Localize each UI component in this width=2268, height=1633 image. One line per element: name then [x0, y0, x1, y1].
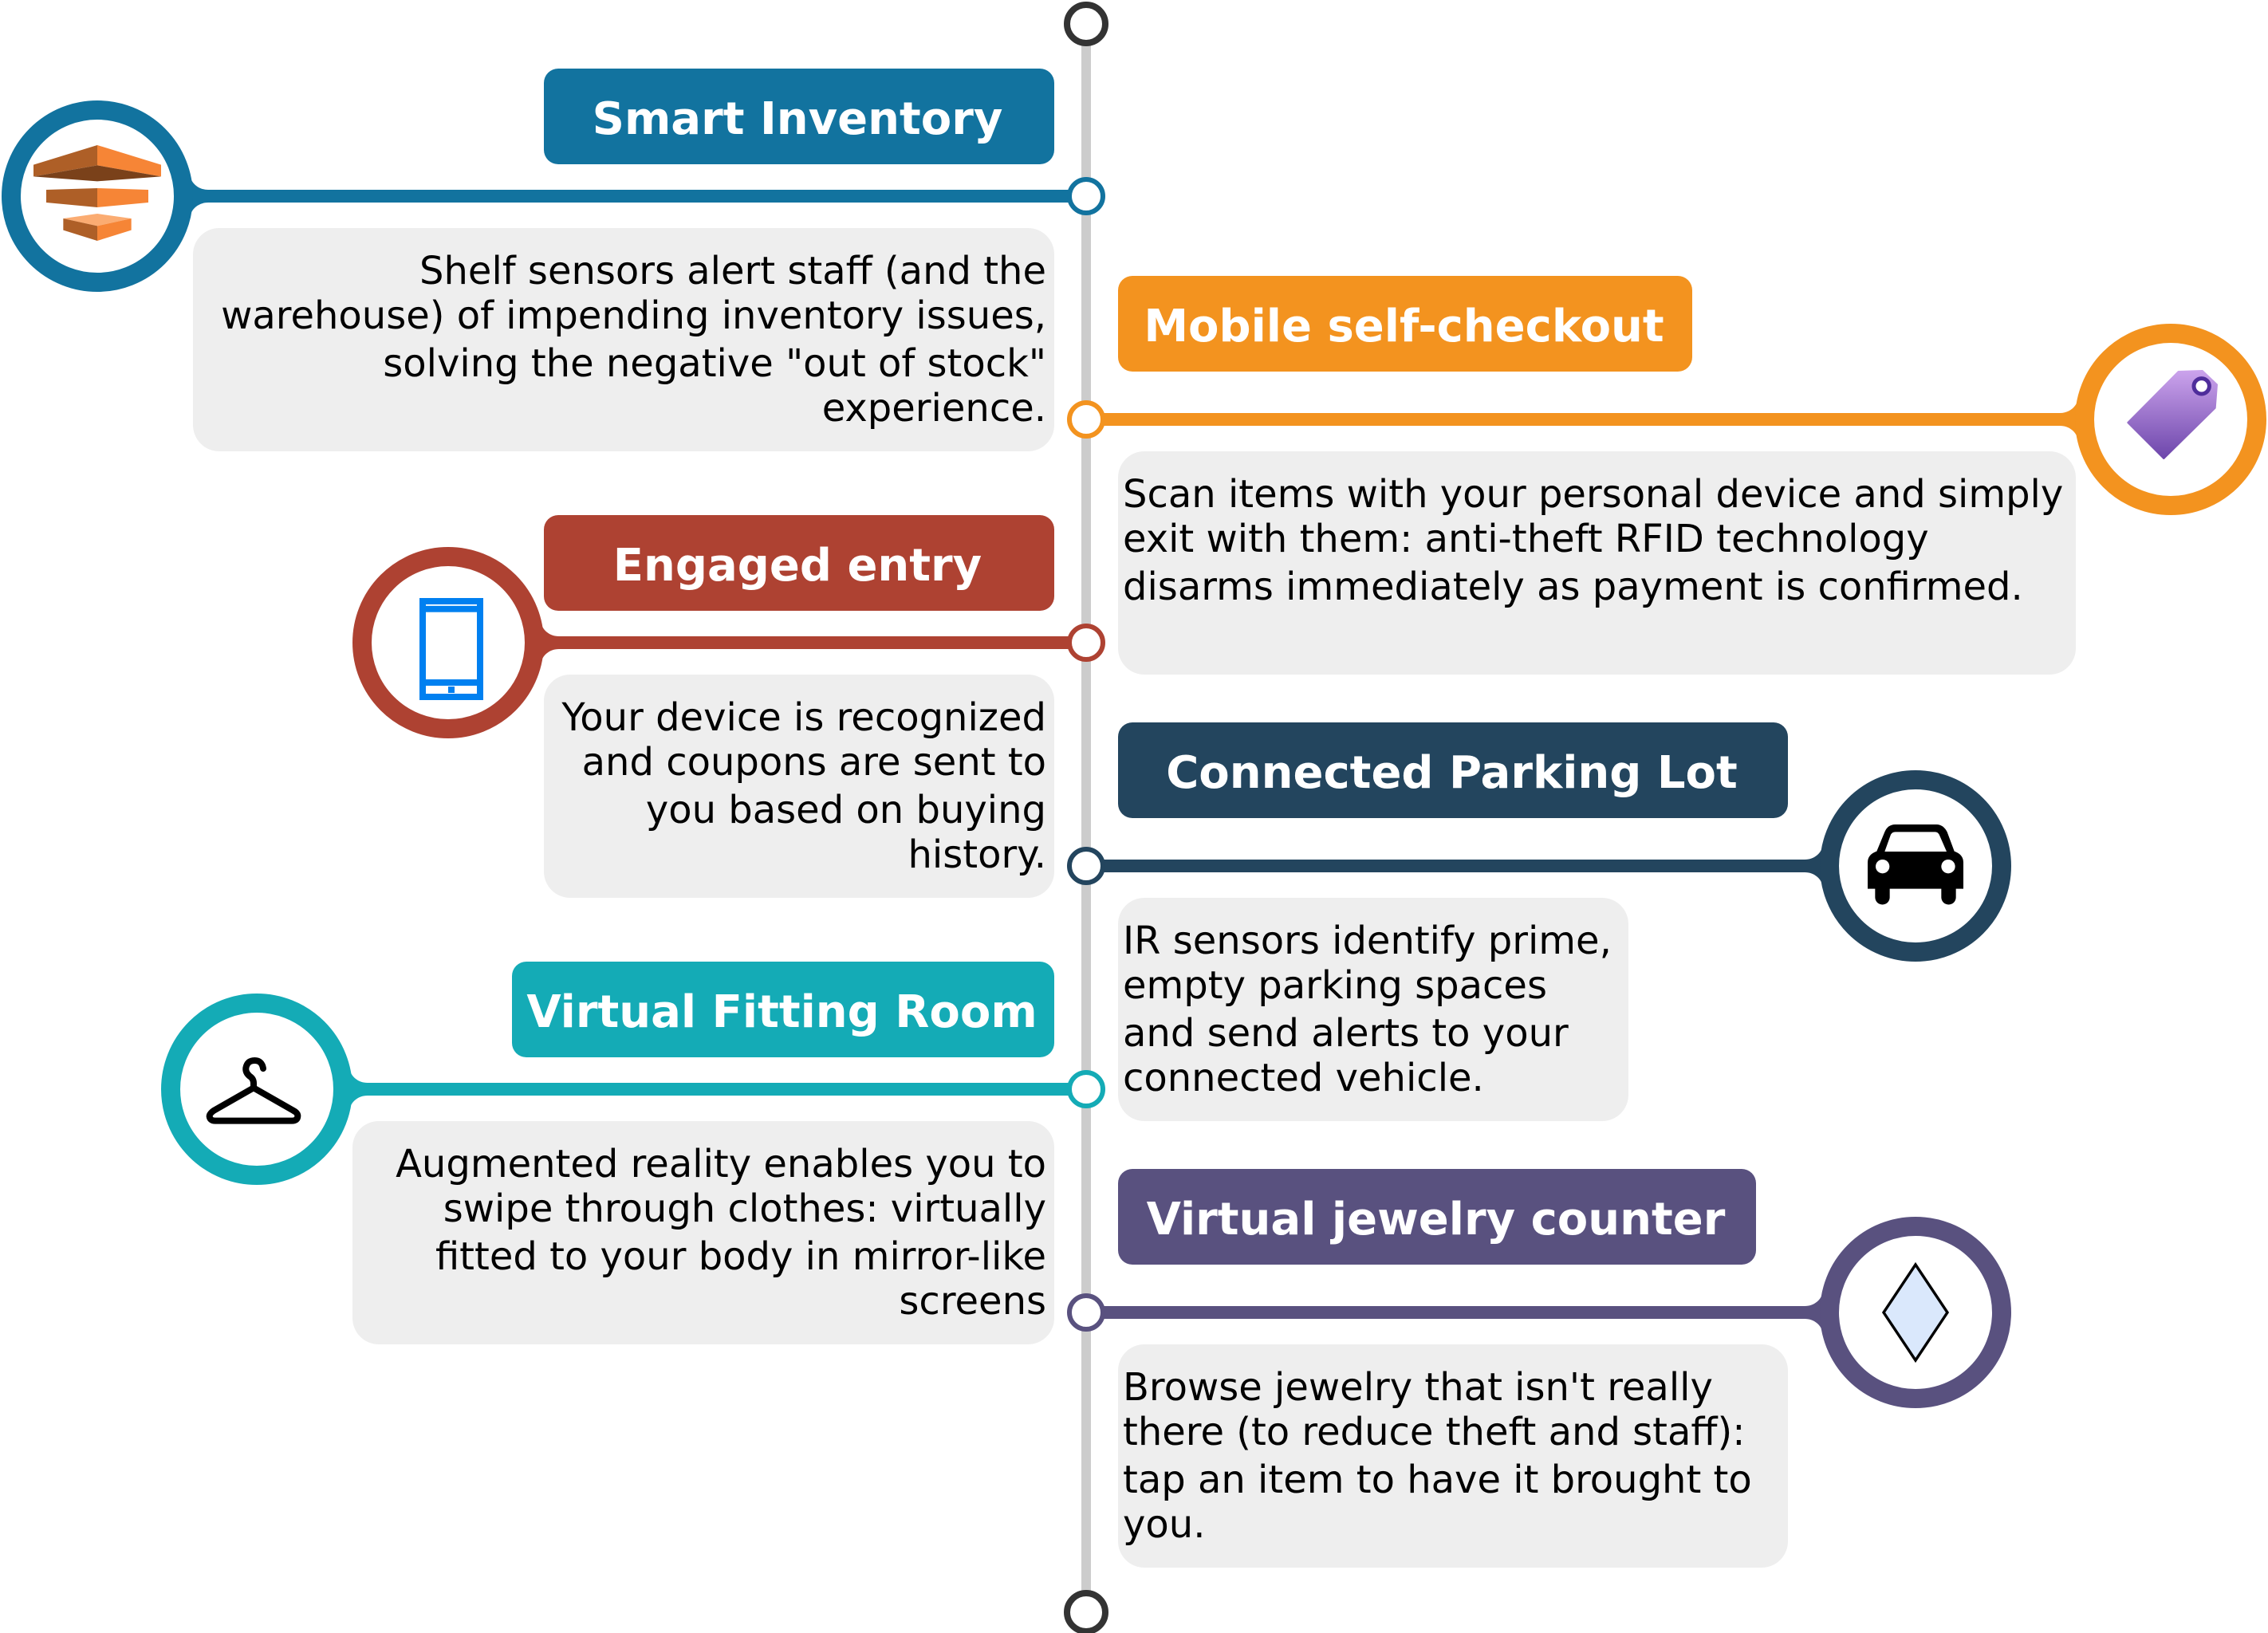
text block: Engaged entry description: you based on buying — [646, 788, 1046, 832]
text block: Engaged entry description: and coupons are sent to — [582, 740, 1046, 785]
icon ring: clothes hanger — [171, 1003, 343, 1175]
heading: Virtual Fitting Room: Virtual Fitting Room — [526, 986, 1038, 1038]
icon ring: inventory layers — [11, 110, 183, 282]
text block: Mobile self-checkout description — [1118, 451, 2076, 675]
text block: Smart Inventory description — [193, 228, 1054, 451]
heading: Virtual jewelry counter: Virtual jewelry counter — [1147, 1194, 1726, 1245]
text block: Mobile self-checkout description: disarms immediately as payment is confirmed. — [1123, 565, 2023, 609]
text block: Virtual Fitting Room description: fitted to your body in mirror-like — [435, 1234, 1046, 1279]
text block: Mobile self-checkout description: exit with them: anti-theft RFID technology — [1123, 517, 1929, 561]
heading: Connected Parking Lot: Connected Parking Lot — [1166, 747, 1738, 799]
connector: Engaged entry — [528, 622, 1103, 663]
text block: Engaged entry description: history. — [908, 832, 1046, 877]
text block: Virtual jewelry counter description: Browse jewelry that isn't really — [1123, 1365, 1713, 1410]
text block: Connected Parking Lot description — [1118, 898, 1628, 1121]
text block: Virtual Fitting Room description: screens — [899, 1279, 1046, 1324]
text block: Smart Inventory description: solving the negative "out of stock" — [383, 341, 1046, 386]
text block: Smart Inventory description: Shelf sensors alert staff (and the — [419, 249, 1046, 293]
text block: Virtual Fitting Room description — [352, 1121, 1054, 1344]
text block: Virtual jewelry counter description — [1118, 1344, 1788, 1568]
heading: Virtual jewelry counter — [1118, 1169, 1756, 1265]
heading: Connected Parking Lot — [1118, 722, 1788, 818]
panel: Virtual Fitting Room — [171, 962, 1103, 1344]
text block: Smart Inventory description: experience. — [822, 386, 1046, 431]
heading: Mobile self-checkout — [1118, 276, 1692, 372]
text block: Virtual jewelry counter description: you. — [1123, 1502, 1205, 1547]
panel: Virtual jewelry counter — [1069, 1169, 2002, 1568]
text block: Smart Inventory description: warehouse) of impending inventory issues, — [221, 293, 1046, 338]
text block: Connected Parking Lot description: IR sensors identify prime, — [1123, 919, 1612, 963]
text block: Connected Parking Lot description: and send alerts to your — [1123, 1011, 1569, 1056]
timeline spine — [1067, 5, 1105, 1631]
text block: Virtual Fitting Room description: swipe through clothes: virtually — [443, 1186, 1046, 1231]
connector: Virtual Fitting Room — [337, 1068, 1103, 1110]
icon ring: smartphone — [362, 557, 534, 729]
text block: Engaged entry description: Your device is recognized — [561, 695, 1046, 740]
connector: Smart Inventory — [177, 175, 1103, 217]
connector: Connected Parking Lot — [1069, 845, 1836, 887]
heading: Smart Inventory: Smart Inventory — [593, 93, 1002, 145]
connector: Virtual jewelry counter — [1069, 1292, 1836, 1333]
panel: Mobile self-checkout — [1069, 276, 2257, 675]
icon ring: price tag — [2085, 333, 2257, 506]
text block: Connected Parking Lot description: connected vehicle. — [1123, 1056, 1484, 1100]
panel: Smart Inventory — [11, 69, 1103, 451]
panel: Engaged entry — [362, 515, 1103, 898]
icon ring: diamond — [1829, 1226, 2002, 1399]
text block: Virtual Fitting Room description: Augmented reality enables you to — [396, 1142, 1046, 1186]
heading: Engaged entry: Engaged entry — [613, 540, 982, 592]
text block: Engaged entry description — [544, 675, 1054, 898]
heading: Smart Inventory — [544, 69, 1054, 164]
connector: Mobile self-checkout — [1069, 399, 2091, 440]
heading: Virtual Fitting Room — [512, 962, 1054, 1057]
panel: Connected Parking Lot — [1069, 722, 2002, 1121]
heading: Engaged entry — [544, 515, 1054, 611]
heading: Mobile self-checkout: Mobile self-checkout — [1144, 301, 1664, 352]
text block: Mobile self-checkout description: Scan items with your personal device and simply — [1123, 472, 2063, 517]
icon ring: car — [1829, 780, 2002, 952]
text block: Connected Parking Lot description: empty parking spaces — [1123, 963, 1547, 1008]
text block: Virtual jewelry counter description: tap an item to have it brought to — [1123, 1458, 1752, 1502]
text block: Virtual jewelry counter description: there (to reduce theft and staff): — [1123, 1410, 1745, 1454]
